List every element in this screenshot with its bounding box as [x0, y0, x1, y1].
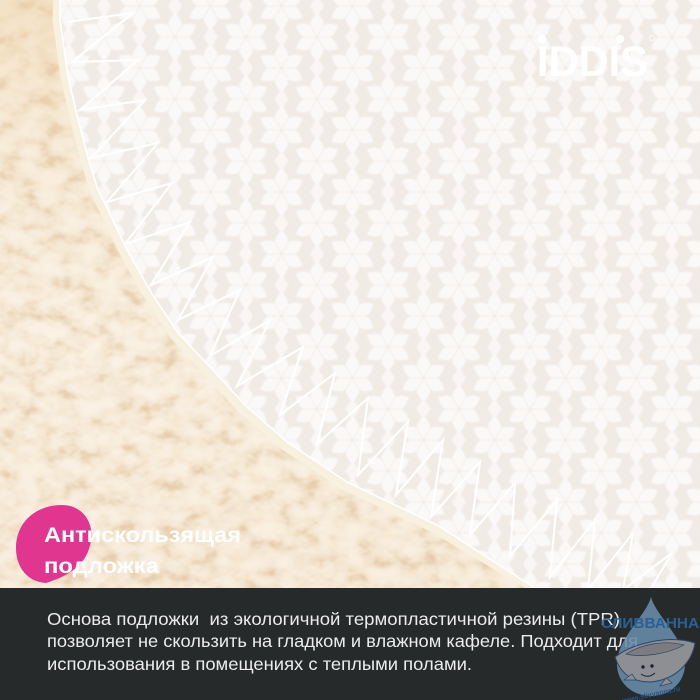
watermark: drop with bathtub — [601, 597, 699, 700]
description text: использования в помещениях с теплыми полами. — [47, 654, 472, 674]
heading: подложка — [44, 555, 159, 578]
edge rail stitching — [60, 0, 538, 590]
heading: Антискользящая — [44, 524, 241, 547]
description text: Основа подложки из экологичной термопластичной резины (TPR) — [47, 609, 620, 629]
description text — [47, 609, 638, 674]
footer band — [0, 588, 700, 700]
heading — [44, 524, 241, 578]
description text: позволяет не скользить на гладком и влажном кафеле. Подходит для — [47, 631, 638, 651]
zigzag white stitching — [67, 13, 672, 590]
logo: IDDIS: IDDIS — [537, 38, 648, 86]
rubber backing mat with star texture — [55, 0, 700, 590]
watermark: drop with bathtub: СЛИВВАННА — [601, 615, 699, 632]
badge: pink blob — [16, 505, 91, 583]
